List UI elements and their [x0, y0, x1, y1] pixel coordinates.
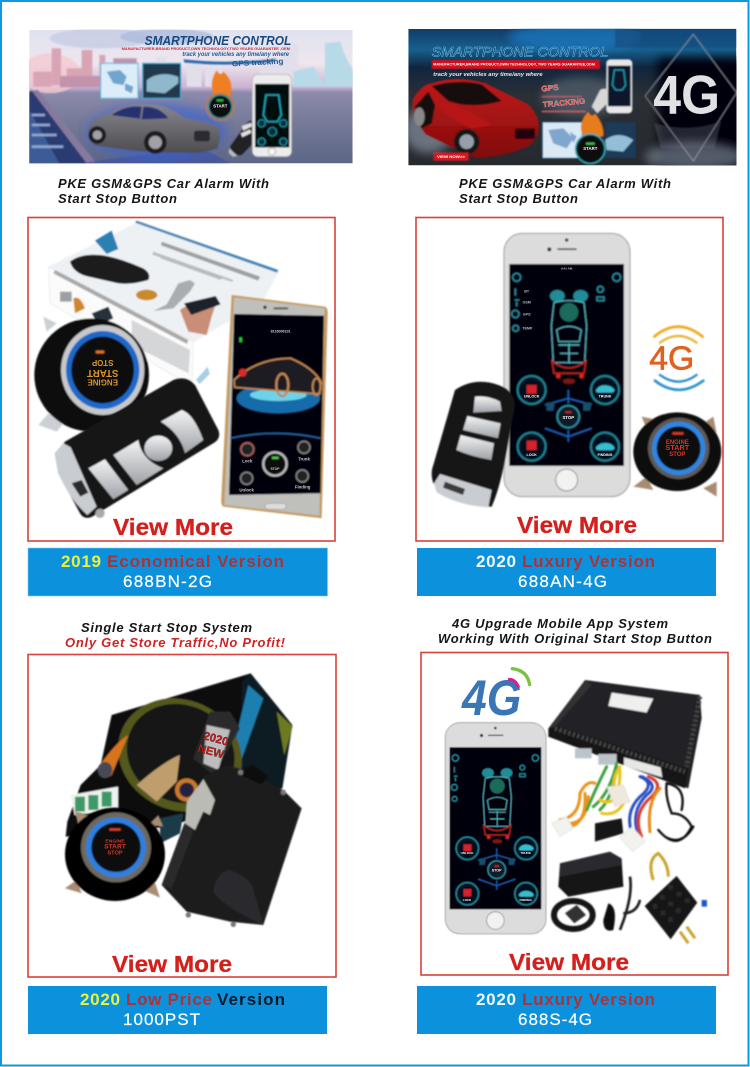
start stop button: ENGINE: [105, 838, 125, 844]
app labels: UNLOCK: [524, 394, 540, 398]
start stop button: [633, 412, 721, 497]
app labels: LOCK: [526, 453, 537, 457]
button label: START: [87, 367, 118, 378]
banner gps label: GPS tracking: [232, 57, 284, 68]
app labels: [522, 266, 613, 457]
start stop button: [65, 808, 165, 901]
title: 4G upgrade: Working With Original Start Stop Button: [438, 631, 712, 646]
banner tagline: MANUFACTURER,BRAND PRODUCT,OWN TECHNOLOGY, TWO YEARS GUARANTEE,ODM: [433, 63, 595, 67]
title: left top: PKE GSM&GPS Car Alarm With: [58, 176, 269, 191]
version bar: 2020 Luxury 688S: 688S-4G: [518, 1010, 592, 1029]
app labels: BT: [524, 290, 530, 294]
box 2020 new sticker: NEW: [196, 743, 225, 761]
app labels: Lock: [242, 458, 253, 463]
view more: View More: [112, 951, 232, 977]
app labels: [239, 330, 311, 493]
button label: ENGINE: [87, 377, 118, 386]
ECU module: [162, 765, 302, 927]
title: left top: Start Stop Button: [58, 191, 177, 206]
app labels: LOCK: [463, 898, 472, 902]
banner 4G badge: 4G: [653, 63, 720, 125]
app labels: [461, 851, 532, 902]
banner tagline: MANUFACTURER,BRAND PRODUCT,OWN TECHNOLOGY,TWO YEARS GUARANTEE ,OEM: [122, 47, 290, 51]
banner subline: track your vehicles any time/any where: [433, 72, 543, 78]
app labels: TEMP: [522, 326, 533, 330]
version bar: 2020 Low Price: Low Price: [126, 990, 212, 1009]
app labels: GSM: [522, 300, 531, 304]
title: 4G upgrade: 4G Upgrade Mobile App System: [451, 616, 668, 631]
icon: 4G signal: [649, 327, 703, 390]
app labels: TRUNK: [599, 394, 612, 398]
app labels: 9:41 AM: [561, 266, 573, 270]
banner start label: START: [213, 103, 228, 108]
version bar: 2020 Luxury 688S: [417, 986, 716, 1034]
app labels: 8116006231: [271, 330, 291, 334]
title: single start stop: Single Start Stop System: [81, 620, 252, 635]
banner heading: SMARTPHONE CONTROL: [145, 33, 291, 48]
version bar: 2020 Luxury 688AN: 688AN-4G: [518, 572, 607, 591]
app labels: Trunk: [298, 457, 310, 462]
box 2020 new sticker: 2020: [202, 730, 229, 748]
start stop button: ENGINE: [666, 440, 689, 446]
app labels: UNLOCK: [461, 851, 474, 855]
panel: 688S-4G product: [421, 652, 728, 975]
button label: STOP: [91, 358, 113, 367]
app labels: STOP: [270, 467, 280, 471]
box 2020 new sticker: [196, 730, 229, 761]
version bar: 2019 Economical: 2019: [61, 552, 101, 571]
title: 4G upgrade: [438, 616, 712, 646]
banner start stop label: START: [583, 146, 598, 151]
banner gps label: GPS: [541, 83, 560, 94]
version bar: 2020 Luxury 688S: 2020: [476, 990, 516, 1009]
view more: View More: [509, 949, 629, 975]
banner subline: track your vehicles any time/any where: [182, 52, 290, 58]
version bar: 2020 Luxury 688S: Luxury Version: [522, 990, 655, 1009]
start stop button: START: [665, 443, 690, 452]
button label: [87, 358, 118, 386]
panel: 688AN-4G product: [416, 218, 723, 541]
title: single start stop: [65, 620, 286, 650]
banner tracking label: TRACKING: [542, 97, 586, 109]
version bar: 2020 Luxury 688AN: [417, 548, 716, 596]
key fob: [432, 382, 515, 507]
phone with app: [504, 233, 630, 497]
view more: View More: [113, 514, 233, 540]
title: right top: PKE GSM&GPS Car Alarm With: [459, 176, 671, 191]
panel: banner smartphone control (left): [20, 28, 353, 163]
version bar: 2020 Luxury 688AN: Luxury Version: [522, 552, 655, 571]
version bar: 2019 Economical: 688BN-2G: [123, 572, 212, 591]
start stop button: START: [104, 843, 126, 850]
product box: [66, 673, 293, 843]
title: left top: [58, 176, 269, 206]
panel: 1000PST product: [28, 654, 336, 977]
version bar: 2020 Low Price: 2020: [80, 990, 120, 1009]
app labels: Finding: [295, 485, 311, 490]
view more: View More: [517, 512, 637, 538]
icon: 4G signal: 4G: [649, 340, 694, 377]
app labels: TRUNK: [520, 851, 532, 855]
app labels: GPS: [523, 313, 531, 317]
panel: banner smartphone control 4G (right): [408, 28, 736, 166]
version bar: 2019 Economical: [28, 548, 328, 596]
version bar: 2019 Economical: Economical Version: [107, 552, 284, 571]
panel: 688BN-2G product: [28, 218, 335, 541]
app labels: STOP: [492, 868, 502, 872]
banner heading: SMARTPHONE CONTROL: [432, 45, 608, 60]
start stop button: STOP: [107, 850, 123, 856]
app labels: FINDING: [597, 453, 613, 457]
version bar: 2020 Low Price: 1000PST: [123, 1010, 200, 1029]
ECU with wiring and accessories: [548, 680, 707, 943]
phone with app: [445, 723, 546, 934]
phone with car app: [221, 295, 328, 518]
app labels: Unlock: [239, 488, 254, 493]
title: right top: Start Stop Button: [459, 191, 578, 206]
banner view now button: VIEW NOW>>: [437, 155, 465, 159]
app labels: STOP: [562, 415, 574, 420]
title: right top: [459, 176, 671, 206]
start stop button: STOP: [669, 452, 685, 458]
version bar: 2020 Luxury 688AN: 2020: [476, 552, 516, 571]
version bar: 2020 Low Price: Version: [217, 990, 285, 1009]
key fob: [55, 378, 219, 518]
product photo: box, button: [34, 221, 279, 432]
title: single start stop: Only Get Store Traffic,No Profit!: [65, 635, 286, 650]
icon: 4G logo: 4G: [461, 670, 521, 726]
app labels: FINDING: [520, 898, 532, 902]
version bar: 2020 Low Price: [28, 986, 327, 1034]
